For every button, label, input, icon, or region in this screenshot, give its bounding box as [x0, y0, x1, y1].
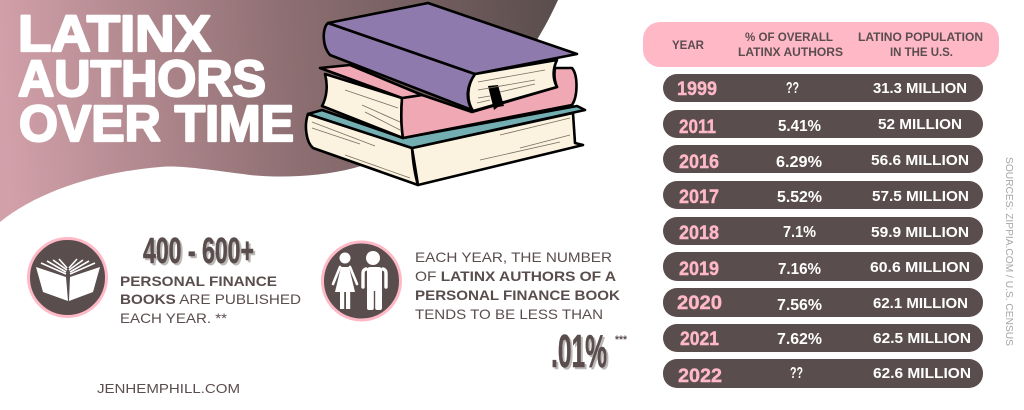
table row: 2019: 60.6 MILLION: [870, 259, 970, 276]
table row: 2022: 62.6 MILLION: [873, 365, 971, 382]
table row: 2011: 52 MILLION: [878, 116, 962, 133]
table row: 2019: 2019: [679, 259, 719, 280]
table row: 2016: [663, 145, 983, 173]
table row: 2017: [663, 181, 983, 209]
stat: .01%: .01%: [551, 325, 607, 377]
table row: 2022: 2022: [678, 366, 722, 387]
table row: 1999: [663, 74, 983, 102]
table row: 1999: 31.3 MILLION: [873, 80, 967, 97]
text block: personal finance books: BOOKS ARE PUBLISHED: [120, 291, 301, 307]
table header: YEAR: [672, 38, 704, 52]
table row: 2021: 2021: [680, 329, 719, 350]
table row: 2022: [663, 359, 983, 388]
table row: 2011: 5.41%: [778, 118, 821, 135]
table row: 2018: 7.1%: [783, 224, 816, 241]
table row: 2021: [663, 324, 983, 352]
table row: 2017: 57.5 MILLION: [872, 188, 969, 205]
text block: personal finance books: [120, 273, 301, 326]
table row: 2017: 2017: [679, 187, 719, 208]
table row: 1999: ??: [786, 80, 799, 97]
table row: 2020: 7.56%: [777, 297, 822, 314]
website credit: JENHEMPHILL.COM: [97, 381, 240, 396]
table row: 2019: [663, 252, 983, 281]
table row: 2019: 7.16%: [778, 261, 821, 278]
table row: 1999: 1999: [677, 79, 717, 100]
table header: LATINX AUTHORS: [738, 45, 843, 59]
table row: 2018: 59.9 MILLION: [871, 224, 969, 241]
table header: IN THE U.S.: [890, 45, 953, 59]
stat: 400 - 600+: 400 - 600+: [143, 230, 254, 271]
title: AUTHORS: [18, 50, 266, 107]
table row: 2021: 7.62%: [777, 331, 822, 348]
table row: 2018: [663, 217, 983, 245]
table row: 2016: 2016: [679, 152, 719, 173]
table row: 2022: ??: [790, 365, 803, 382]
sources note: SOURCES: ZIPPIA.COM / U.S. CENSUS: [1003, 157, 1015, 346]
table row: 2020: 2020: [677, 293, 722, 314]
text block: latinx authors each year: EACH YEAR, THE NUMBER: [415, 249, 612, 265]
footnote marker: ***: [615, 334, 628, 346]
table row: 2011: [663, 110, 983, 138]
text block: personal finance books: PERSONAL FINANCE: [120, 273, 277, 289]
table header: [643, 22, 999, 67]
text block: latinx authors each year: TENDS TO BE LESS THAN: [415, 306, 603, 322]
table row: 2016: 6.29%: [776, 154, 822, 171]
title: LATINX: [18, 5, 211, 62]
table row: 2021: 62.5 MILLION: [873, 330, 971, 347]
table row: 2017: 5.52%: [777, 189, 822, 206]
title: [18, 5, 294, 152]
table row: 2020: 62.1 MILLION: [873, 295, 968, 312]
icon: open book: [28, 238, 106, 316]
illustration: stack of books: [306, 3, 585, 185]
table row: 2018: 2018: [679, 223, 719, 244]
text block: latinx authors each year: OF LATINX AUTHORS OF A: [415, 268, 616, 284]
table row: 2016: 56.6 MILLION: [871, 152, 969, 169]
table row: 2011: 2011: [679, 117, 716, 138]
table header: LATINO POPULATION: [858, 30, 983, 44]
text block: latinx authors each year: [415, 249, 620, 322]
table header: % OF OVERALL: [745, 30, 833, 44]
title: OVER TIME: [19, 95, 294, 152]
header swoosh background: [0, 0, 558, 222]
text block: latinx authors each year: PERSONAL FINANCE BOOK: [415, 287, 620, 303]
icon: two people: [322, 242, 400, 320]
text block: personal finance books: EACH YEAR. **: [120, 310, 228, 326]
table row: 2020: [663, 288, 983, 317]
